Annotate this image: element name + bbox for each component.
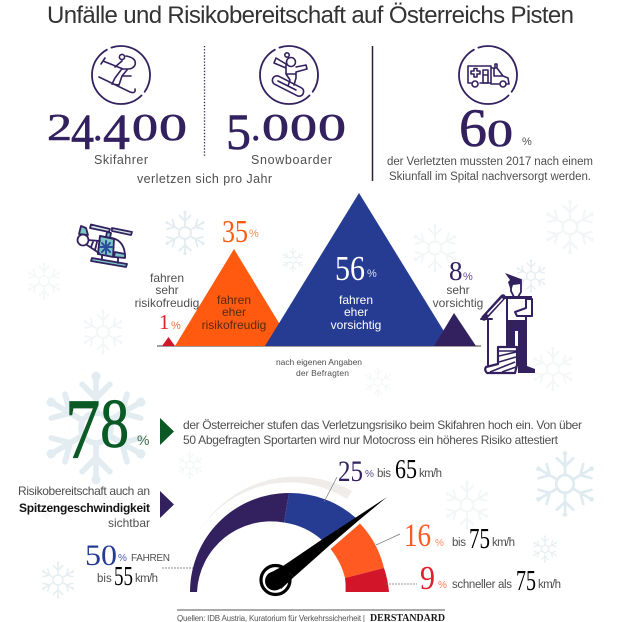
label: 16 percent: km/h: [492, 537, 515, 549]
label: 50 percent: %: [118, 553, 127, 564]
label: fahren eher vorsichtig: fahren: [339, 293, 373, 307]
label: 50 percent: FAHREN: [131, 553, 170, 564]
label: 35 percent: 35: [222, 213, 248, 249]
label: fahren eher risikofreudig: fahren: [217, 293, 251, 307]
segment: 25 percent: [284, 493, 356, 540]
label: Skifahrer: Skifahrer: [94, 153, 148, 167]
note: nach eigenen Angaben: nach eigenen Angaben: [276, 357, 362, 367]
label: 56 percent: %: [367, 268, 377, 280]
stat: 5.000: 0: [262, 107, 289, 149]
label: 16 percent: [404, 518, 515, 555]
icon: helicopter: [78, 224, 132, 267]
gauge background arc: [200, 477, 352, 530]
mountain: 35 percent orange: [175, 249, 293, 346]
label: fahren sehr risikofreudig: sehr: [155, 283, 179, 297]
label: fahren eher risikofreudig: eher: [222, 305, 246, 319]
label: 8 percent: %: [463, 271, 473, 283]
label: 9 percent: 9: [420, 560, 435, 597]
stat: 5.000: 0: [290, 107, 317, 149]
text block: top speed: Spitzengeschwindigkeit: [19, 501, 150, 515]
label: fahren eher risikofreudig: risikofreudig: [202, 318, 266, 332]
divider dotted: [204, 46, 206, 157]
label: 16 percent: 16: [404, 518, 431, 554]
stat: 24.400: 4: [71, 105, 94, 161]
label: 25 percent: [338, 454, 442, 488]
source line: [177, 612, 445, 622]
label: sehr vorsichtig: [433, 283, 483, 310]
label: sehr vorsichtig: vorsichtig: [433, 296, 483, 310]
label: 50 percent: 50: [85, 539, 117, 572]
stat: 78 percent: [65, 381, 149, 477]
text block: top speed: [18, 484, 150, 530]
label: fahren eher vorsichtig: eher: [344, 305, 368, 319]
label: 8 percent: 8: [449, 256, 462, 286]
text block: risk assessment: der Österreicher stufen das Verletzungsrisiko beim Skifahren hoch ein. Von über: [183, 418, 582, 432]
text block: hospital share: [387, 156, 593, 183]
panel: skiers: [47, 34, 187, 167]
segment: 16 percent: [330, 524, 384, 578]
stat: 24.400: .: [93, 107, 102, 149]
label: 25 percent: %: [365, 469, 374, 480]
stat: 60 percent: 0: [487, 113, 513, 155]
text block: hospital share: der Verletzten mussten 2017 nach einem: [387, 156, 593, 168]
label: 1 percent: [159, 310, 181, 334]
hub: [261, 566, 294, 594]
divider solid: [372, 46, 374, 181]
stat: 5.000: 5: [226, 105, 251, 161]
label: fahren sehr risikofreudig: fahren: [150, 271, 184, 285]
label: 50 percent: bis: [97, 573, 112, 585]
label: 16 percent: 75: [469, 523, 490, 555]
label: 25 percent: bis: [377, 468, 391, 480]
text block: hospital share: Skiunfall im Spital nachversorgt werden.: [389, 171, 591, 183]
stat: 24.400: 2: [47, 107, 72, 149]
decorative snowflakes: [26, 201, 596, 598]
label: sehr vorsichtig: sehr: [446, 283, 470, 297]
mountain: 56 percent blue: [265, 193, 453, 346]
label: 50 percent: km/h: [135, 573, 158, 585]
label: 50 percent: [85, 539, 170, 591]
mountain: 1 percent red: [162, 337, 175, 346]
label: fahren eher risikofreudig: [202, 293, 266, 332]
text block: risk assessment: [183, 418, 582, 447]
stat: 78 percent: %: [137, 432, 149, 448]
needle: [283, 497, 387, 577]
text block: risk assessment: 50 Abgefragten Sportarten wird nur Motocross ein höheres Risiko attestiert: [183, 433, 559, 447]
leader: 25 percent: [324, 477, 337, 502]
leader: 9 percent: [386, 583, 417, 585]
title: Unfälle und Risikobereitschaft auf Österreichs Pisten: [47, 2, 574, 29]
leader: 16 percent: [376, 534, 400, 545]
mountain: 8 percent purple: [434, 313, 476, 346]
arrow: purple: [160, 491, 174, 518]
label: 35 percent: %: [249, 228, 259, 240]
label: 25 percent: km/h: [419, 468, 442, 480]
arrow: green: [160, 418, 174, 445]
stat: 5.000: 0: [318, 107, 346, 149]
stat: 24.400: 0: [132, 107, 158, 149]
label: 16 percent: bis: [452, 537, 466, 549]
caption: verletzen sich pro Jahr: verletzen sich pro Jahr: [137, 172, 272, 186]
label: 50 percent: 55: [114, 561, 133, 591]
label: fahren sehr risikofreudig: [135, 271, 199, 310]
icon: snowboarder: [248, 34, 330, 116]
text block: top speed: sichtbar: [108, 516, 150, 530]
stat: 5.000: .: [251, 107, 260, 149]
gauge chart: [190, 477, 389, 594]
note: nach eigenen Angaben: der Befragten: [296, 368, 349, 378]
label: 16 percent: %: [435, 538, 444, 549]
icon: ambulance: [447, 34, 529, 116]
stat: 24.400: 0: [159, 107, 187, 149]
label: 56 percent: 56: [335, 249, 365, 288]
mountain chart: [135, 193, 483, 378]
panel: hospital: [387, 34, 593, 183]
icon: skier: [80, 34, 162, 116]
label: 1 percent: 1: [159, 310, 170, 334]
stat: 78 percent: 8: [100, 386, 129, 463]
note: nach eigenen Angaben: [276, 357, 362, 378]
percent sign: %: [522, 136, 532, 148]
icon: injured man with crutch: [481, 273, 535, 373]
label: 9 percent: [420, 560, 561, 597]
leader: 50 percent: [162, 567, 193, 569]
label: fahren eher vorsichtig: vorsichtig: [331, 318, 381, 332]
label: fahren sehr risikofreudig: risikofreudig: [135, 296, 199, 310]
panel: snowboarders: [226, 34, 346, 167]
label: 9 percent: km/h: [538, 579, 561, 591]
label: 9 percent: schneller als: [452, 579, 512, 591]
label: fahren eher vorsichtig: [331, 293, 381, 332]
segment: 50 percent: [190, 493, 289, 592]
label: 25 percent: 65: [395, 454, 417, 484]
text block: top speed: Risikobereitschaft auch an: [18, 484, 150, 498]
baseline: [157, 345, 481, 347]
label: 8 percent: [449, 256, 473, 286]
label: 1 percent: %: [171, 320, 181, 332]
label: Snowboarder: Snowboarder: [251, 153, 332, 167]
label: 9 percent: 75: [516, 565, 536, 597]
stat: 78 percent: 7: [65, 381, 100, 477]
stat: 24.400: 4: [103, 105, 130, 161]
label: 25 percent: 25: [338, 455, 363, 488]
stat: 60 percent: 6: [459, 98, 487, 158]
footer rule: [177, 609, 445, 611]
label: 9 percent: %: [438, 580, 447, 591]
segment: 9 percent: [345, 568, 389, 592]
